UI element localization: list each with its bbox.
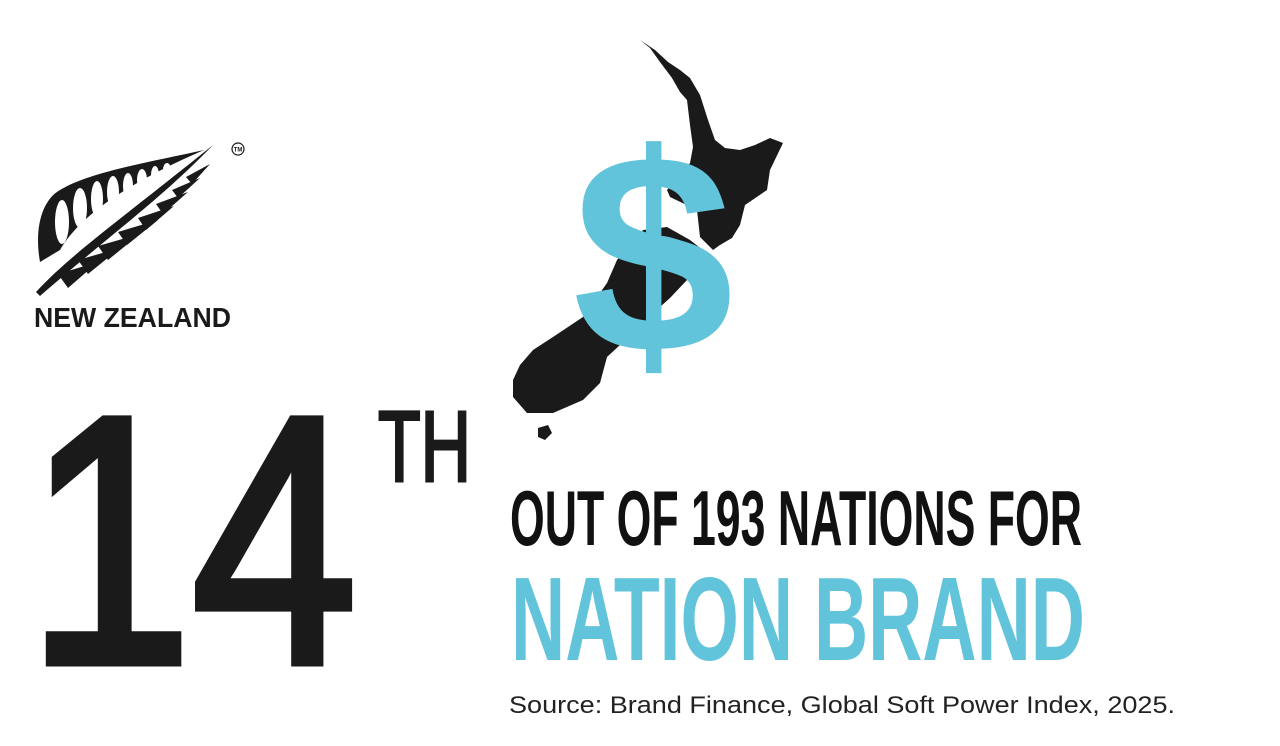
source: Source: Brand Finance, Global Soft Power Index, 2025. <box>509 692 1175 719</box>
map: New Zealand silhouette <box>513 40 783 440</box>
icon: fern <box>36 145 213 296</box>
logo: New Zealand fern <box>34 143 244 333</box>
superscript TH: TH <box>378 391 471 503</box>
logo text: NEW ZEALAND <box>34 302 231 333</box>
trademark: TM <box>234 148 242 154</box>
trademark <box>232 143 244 155</box>
icon: dollar sign: $ <box>572 95 734 412</box>
big rank number: 14 <box>27 343 357 737</box>
